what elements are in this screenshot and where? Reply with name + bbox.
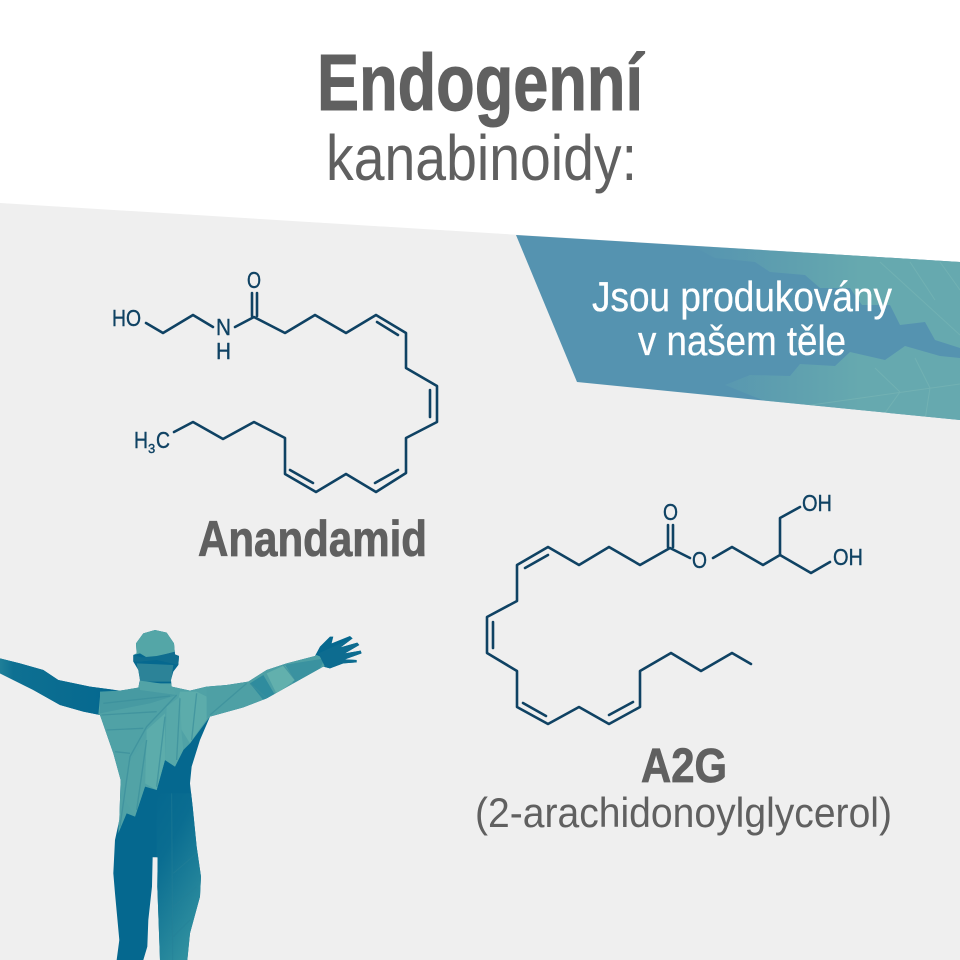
molecule: 2-AG: O xyxy=(692,547,707,573)
label: Anandamid: Anandamid xyxy=(198,511,427,567)
molecule: anandamide xyxy=(112,267,437,492)
molecule: anandamide: HO xyxy=(112,305,141,331)
banner text: Jsou produkovány xyxy=(592,273,892,320)
head xyxy=(133,630,175,657)
title: kanabinoidy: xyxy=(326,122,637,194)
molecule: 2-AG xyxy=(487,490,863,724)
veins xyxy=(102,665,297,827)
label: A2G: (2-arachidonoylglycerol) xyxy=(475,789,892,836)
label: A2G: A2G xyxy=(641,740,727,793)
background panel xyxy=(0,203,960,960)
title: Endogenní xyxy=(317,38,645,127)
label: A2G xyxy=(475,740,892,836)
molecule: anandamide: H xyxy=(134,427,148,453)
molecule: 2-AG: O xyxy=(663,499,678,525)
right arm xyxy=(207,655,328,718)
figure: human silhouette with leaf texture xyxy=(0,620,367,960)
banner: produced in our body xyxy=(516,235,960,425)
molecule: 2-AG: OH xyxy=(833,544,863,570)
molecule: 2-AG: OH xyxy=(802,490,832,516)
molecule: anandamide: C xyxy=(156,427,170,453)
molecule: anandamide: H xyxy=(216,338,231,364)
molecule: anandamide: O xyxy=(247,267,261,293)
banner text xyxy=(592,273,892,364)
molecule: anandamide: N xyxy=(216,314,231,340)
title xyxy=(317,38,645,194)
banner text: v našem těle xyxy=(638,317,846,364)
leaf-textured torso xyxy=(98,683,213,833)
molecule: anandamide: 3 xyxy=(148,441,155,456)
